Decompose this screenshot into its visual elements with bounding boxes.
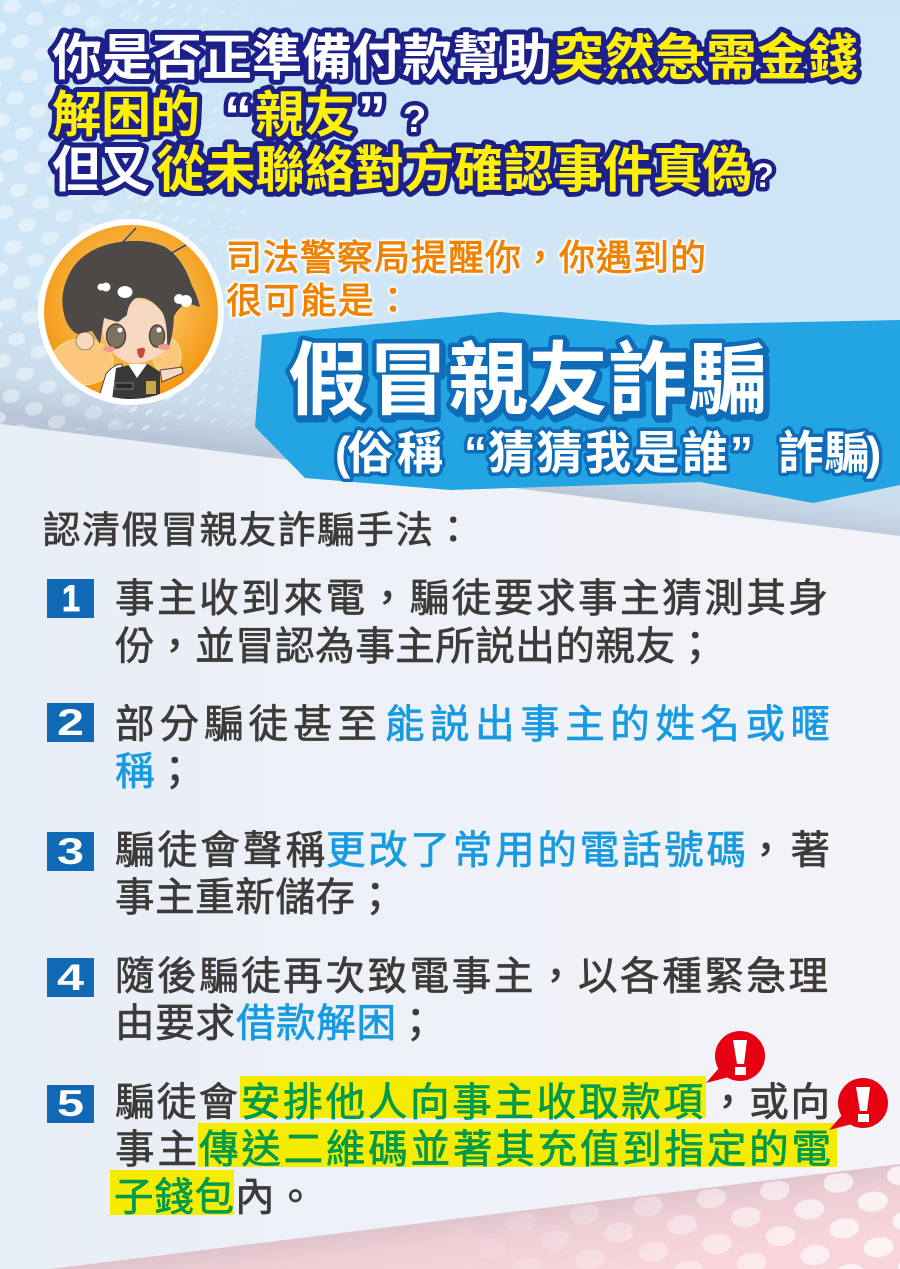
item 3 text: 更改了常用的電話號碼	[326, 829, 746, 873]
item 2	[47, 702, 830, 794]
badge 4: 4	[57, 957, 85, 998]
item 5 text: 事主	[115, 1128, 197, 1172]
subheading: 司法警察局提醒你，你遇到的	[226, 237, 706, 278]
banner	[255, 312, 900, 503]
title: 從未聯絡對方確認事件真偽	[156, 142, 752, 198]
badge 2: 2	[57, 702, 84, 743]
item 5 text: 傳送二維碼並著其充值到指定的電	[199, 1128, 831, 1172]
item 4 text: ；	[396, 1002, 436, 1046]
banner subtitle: 俗稱	[347, 427, 443, 479]
banner title: 假冒親友詐騙	[288, 336, 768, 425]
banner subtitle: ”	[730, 427, 753, 479]
banner subtitle	[335, 427, 881, 479]
item 3 text: 騙徒會聲稱	[115, 829, 325, 873]
item 5 text: 內。	[235, 1176, 315, 1220]
banner subtitle: )	[866, 427, 881, 479]
title: 解困的	[52, 87, 200, 143]
banner subtitle: (	[335, 427, 351, 479]
mascot mouth and cheeks	[103, 344, 170, 358]
item 1 text: 份，並冒認為事主所説出的親友；	[115, 625, 715, 669]
panel: bottom pink dotted corner	[50, 1164, 900, 1269]
item 5 text	[114, 1081, 831, 1220]
icon: alert bubble 2	[829, 1078, 888, 1130]
banner subtitle: 詐騙	[778, 427, 870, 479]
item 4	[47, 955, 828, 1046]
item 4 text: 借款解困	[236, 1002, 396, 1046]
title: 但又	[52, 142, 150, 198]
title: ”	[358, 84, 386, 147]
mascot hair highlights	[98, 282, 192, 307]
item 3 text: 事主重新儲存；	[115, 876, 395, 920]
badge 3	[47, 831, 94, 872]
badge 3: 3	[57, 831, 84, 872]
mascot avatar	[38, 219, 224, 405]
badge 1: 1	[62, 578, 80, 619]
item 3 text: ，著	[746, 829, 830, 873]
item 5 highlights	[110, 1076, 837, 1215]
item 5	[47, 1076, 837, 1220]
item 5 text: ，或向	[708, 1081, 830, 1125]
mascot wings	[51, 338, 181, 385]
item 2 text: 部分騙徒甚至	[115, 703, 377, 747]
item 4 text: 隨後騙徒再次致電事主，以各種緊急理	[115, 955, 828, 999]
title: ?	[753, 157, 774, 195]
title: 親友	[255, 87, 355, 143]
subheading	[226, 237, 706, 321]
item 5 text: 子錢包	[114, 1176, 234, 1220]
item 3	[47, 829, 830, 920]
title: ?	[403, 99, 426, 141]
badge 2	[47, 702, 94, 743]
icon: alert bubble 1	[706, 1031, 765, 1083]
banner subtitle: “	[464, 427, 487, 479]
item 2 text: 稱	[115, 750, 154, 794]
badge 1	[47, 578, 94, 619]
item 1 text: 事主收到來電，騙徒要求事主猜測其身	[115, 577, 828, 621]
item 2 text: ；	[155, 750, 194, 794]
subheading: 很可能是：	[226, 280, 411, 321]
item 5 text: 騙徒會	[115, 1081, 238, 1125]
mascot body	[98, 364, 183, 400]
title: 你是否正準備付款幫助	[52, 30, 552, 86]
item 2 text	[115, 703, 830, 794]
badge 5	[47, 1083, 94, 1124]
mascot hair	[62, 241, 200, 350]
background: upper blue panel	[0, 0, 900, 540]
item 4 text	[115, 955, 828, 1046]
banner subtitle: 猜猜我是誰	[488, 427, 728, 479]
item 3 text	[115, 829, 830, 920]
item 1 text	[115, 577, 828, 669]
mascot face	[100, 300, 172, 364]
title: “	[224, 84, 252, 147]
panel: lower light panel	[0, 424, 900, 1269]
item 2 text: 能説出事主的姓名或暱	[385, 703, 830, 747]
mascot eyes	[106, 324, 164, 348]
badge 4	[47, 957, 94, 998]
mascot antennae	[122, 228, 186, 254]
item 4 text: 由要求	[115, 1002, 235, 1046]
title	[52, 30, 858, 198]
badge 5: 5	[57, 1083, 84, 1124]
heading: methods: 認清假冒親友詐騙手法：	[43, 509, 472, 551]
mascot ear	[76, 332, 94, 350]
title: 突然急需金錢	[554, 30, 858, 86]
item 1	[47, 577, 828, 669]
item 5 text: 安排他人向事主收取款項	[241, 1081, 703, 1125]
